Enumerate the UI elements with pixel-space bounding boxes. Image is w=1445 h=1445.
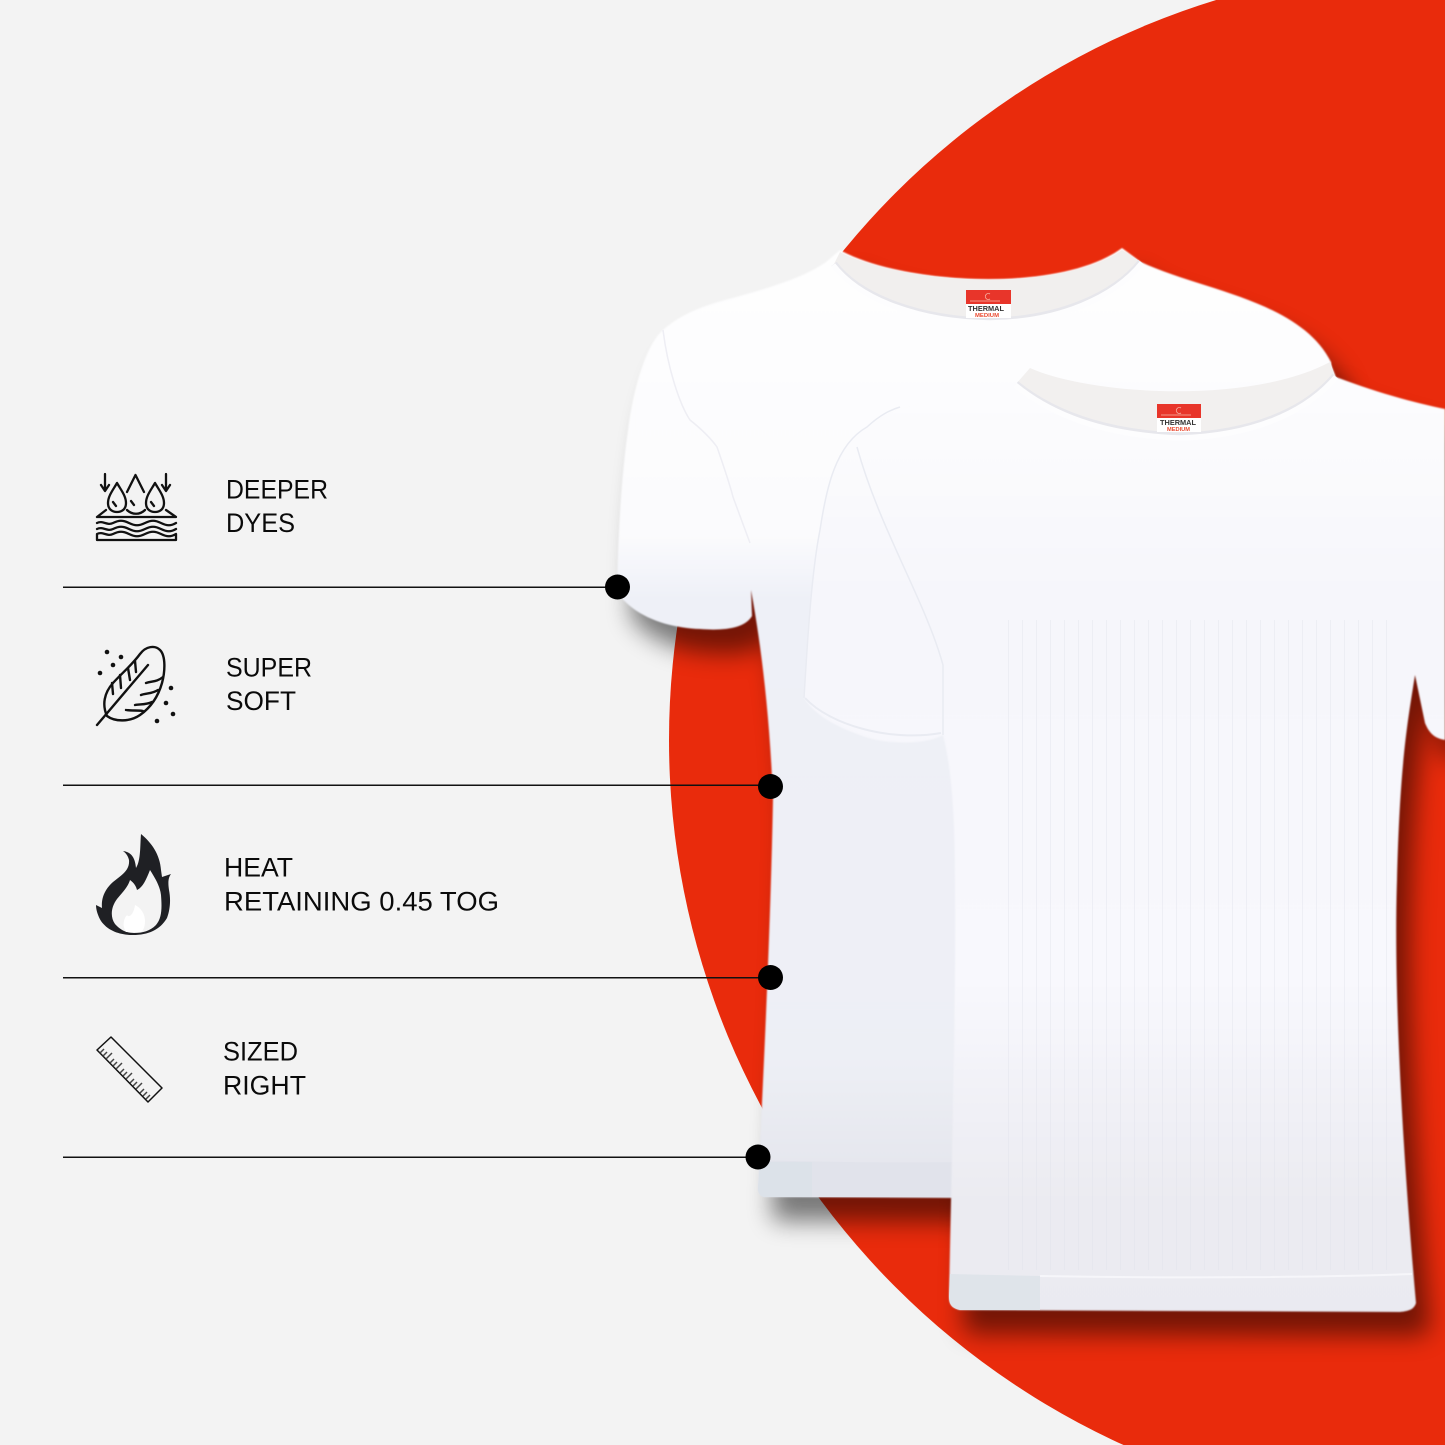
leader line 1 [63,574,630,600]
leader line 4 [63,1144,770,1170]
back shirt hem band [758,1160,960,1197]
text: deeper dyes: DYES [226,508,295,538]
back sleeve seam [663,330,750,543]
back shirt tag: MEDIUM [975,313,999,319]
back shirt tag [966,290,1011,319]
front sleeve outline [804,407,900,698]
icon: flame [96,834,171,935]
back shirt tag: THERMAL [968,306,1005,313]
front t-shirt [804,362,1445,1312]
icon: deeper dyes [97,474,176,540]
shadow: back shirt [631,272,1350,1222]
icon: feather [97,647,175,725]
text: sized right: SIZED [223,1036,298,1066]
text: sized right: RIGHT [223,1070,306,1100]
leader line 2 [63,774,783,799]
red circle [669,0,1445,1445]
front shirt collar [1015,376,1336,438]
front shirt tag: THERMAL [1160,420,1197,427]
front shirt ribs [1000,620,1395,1270]
text: sized right [223,1036,306,1100]
leader line 3 [63,965,783,990]
text: heat retaining: RETAINING 0.45 TOG [224,886,499,916]
text: deeper dyes [226,474,328,538]
shadow: front shirt [818,386,1445,1336]
front shirt sleeve hem [805,698,941,735]
text: heat retaining [224,852,499,916]
text: super soft: SUPER [226,652,312,682]
front shirt neck inner [1016,362,1335,436]
text: super soft [226,652,312,716]
front shirt hem line [1040,1274,1412,1277]
back t-shirt [617,248,1336,1198]
text: super soft: SOFT [226,686,296,716]
front shirt tag: MEDIUM [1167,427,1190,433]
back shirt collar [833,262,1142,323]
back shirt hem corner [758,1162,812,1197]
front shirt tag [1157,404,1201,433]
front shirt sleeve seam [857,447,943,735]
text: deeper dyes: DEEPER [226,474,328,504]
back shirt neck inner [834,250,1141,321]
front shirt hem corner [949,1274,1040,1310]
icon: ruler [97,1037,162,1102]
text: heat retaining: HEAT [224,852,293,882]
